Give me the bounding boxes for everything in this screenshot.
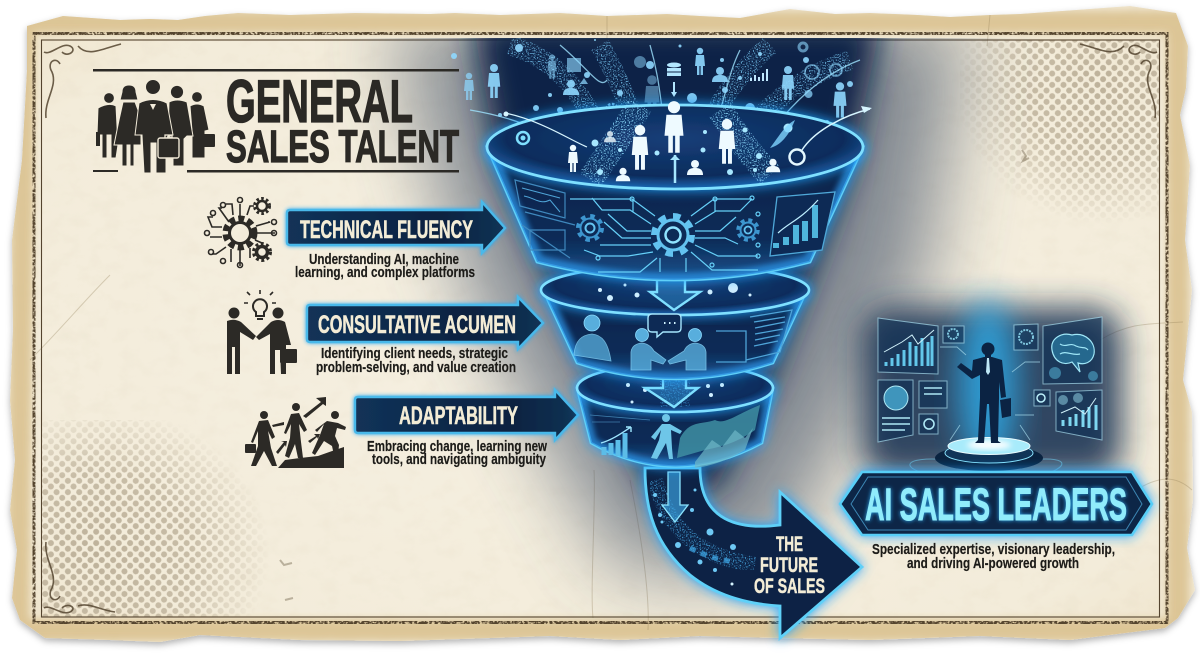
label: the future of sales: OF SALES bbox=[754, 575, 825, 598]
text: consultative acumen description bbox=[316, 346, 516, 376]
arrow: consultative acumen: CONSULTATIVE ACUMEN bbox=[318, 311, 516, 339]
text: technical fluency description: Understanding AI, machine bbox=[309, 252, 459, 268]
text: adaptability description: tools, and navigating ambiguity bbox=[372, 452, 547, 468]
text: AI sales leaders description: Specialized expertise, visionary leadership, bbox=[872, 542, 1115, 558]
arrow: consultative acumen bbox=[307, 297, 543, 349]
podium bbox=[935, 438, 1043, 471]
left dashboard panel bbox=[515, 180, 575, 258]
text: adaptability description bbox=[367, 439, 547, 468]
icon: flow arrow down in spout bbox=[662, 472, 688, 522]
icon: database cylinder bbox=[667, 62, 681, 97]
icon: arrow into section 3 bbox=[645, 372, 698, 407]
banner: AI sales leaders bbox=[840, 472, 1152, 535]
icon: handshake with lightbulb bbox=[227, 290, 297, 374]
icon: circuit gears bbox=[515, 180, 835, 272]
data stream in spout bbox=[653, 480, 755, 586]
arrow: adaptability: ADAPTABILITY bbox=[399, 402, 518, 430]
icon: people climbing with arrow bbox=[245, 397, 346, 468]
label: the future of sales bbox=[754, 533, 825, 598]
spout arrow: the future of sales bbox=[645, 468, 862, 638]
title: general sales talent: GENERAL bbox=[226, 68, 413, 135]
icon: leader silhouette bbox=[957, 342, 1011, 443]
arrow: technical fluency bbox=[287, 202, 505, 253]
mini chart and climbing figure bbox=[590, 405, 760, 468]
text: technical fluency description bbox=[295, 252, 475, 281]
text: AI sales leaders description bbox=[872, 542, 1115, 572]
text: technical fluency description: learning, and complex platforms bbox=[295, 265, 475, 281]
holographic screens bbox=[878, 317, 1102, 442]
icon: group of business people bbox=[96, 80, 215, 173]
title: general sales talent: SALES TALENT bbox=[226, 121, 459, 172]
label: the future of sales: FUTURE bbox=[760, 554, 818, 577]
funnel section 1: technical fluency bbox=[487, 101, 872, 280]
icon: arrow into section 2 bbox=[650, 268, 700, 310]
text: consultative acumen description: problem-selving, and value creation bbox=[316, 360, 516, 376]
halftone: top right bbox=[967, 40, 1159, 214]
handshake scene bbox=[574, 314, 706, 370]
data particles pouring into funnel bbox=[451, 38, 860, 122]
funnel section 2: consultative acumen bbox=[541, 265, 809, 379]
icon: gears and circuit bbox=[204, 198, 276, 268]
title: general sales talent bbox=[226, 68, 459, 172]
panel: general sales talent heading bbox=[93, 68, 459, 173]
icon: brain bbox=[1052, 334, 1094, 372]
funnel section 3: adaptability bbox=[577, 364, 773, 468]
text: adaptability description: Embracing change, learning new bbox=[367, 439, 547, 455]
text: AI sales leaders description: and driving AI-powered growth bbox=[907, 556, 1079, 572]
panel: AI leader hologram scene bbox=[862, 300, 1122, 478]
text: consultative acumen description: Identifying client needs, strategic bbox=[321, 346, 508, 362]
arrow: technical fluency: TECHNICAL FLUENCY bbox=[300, 216, 473, 244]
arrow: adaptability bbox=[355, 390, 578, 440]
funnel shadow glow on paper bbox=[390, 20, 965, 570]
label: the future of sales: THE bbox=[776, 533, 803, 556]
particles inside funnel mouth bbox=[504, 101, 872, 183]
right chart panel bbox=[770, 192, 835, 256]
icon: mini bar chart bbox=[751, 69, 767, 81]
